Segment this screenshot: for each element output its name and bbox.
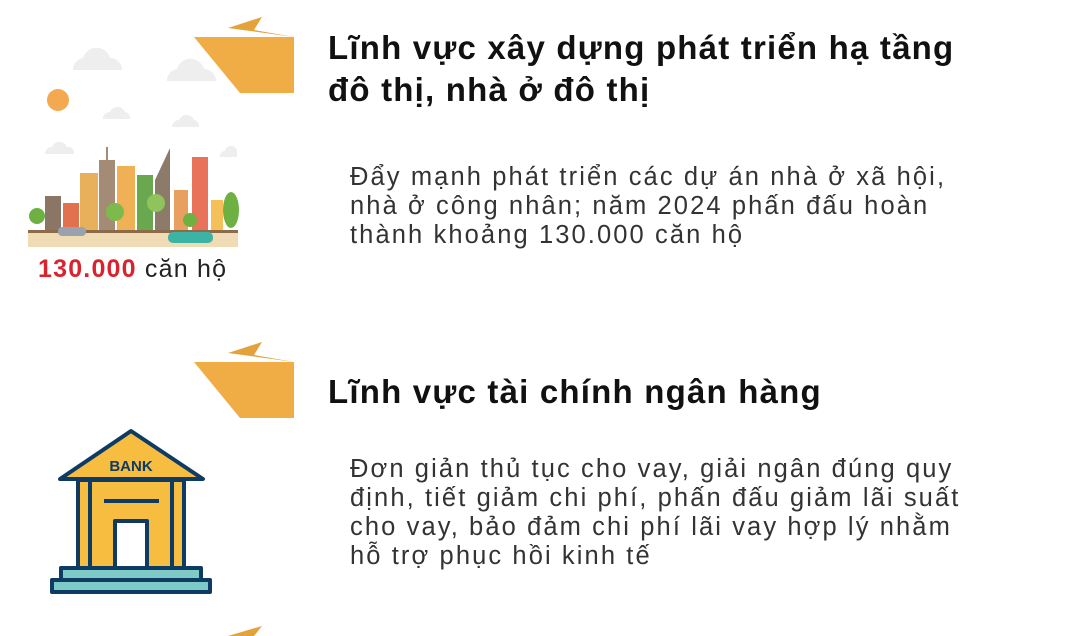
icon: bank: BANK — [109, 458, 153, 475]
text block 2: định, tiết giảm chi phí, phấn đấu giảm lãi suất — [350, 484, 960, 512]
heading 1: đô thị, nhà ở đô thị — [328, 71, 650, 108]
city illustration — [28, 48, 239, 247]
ribbon icon 2 — [194, 342, 294, 418]
text block 1: Đẩy mạnh phát triển các dự án nhà ở xã hội, — [350, 163, 946, 191]
heading 1 — [328, 29, 954, 108]
stat label: 130.000 căn hộ — [38, 255, 227, 283]
text block 2 — [350, 455, 960, 570]
ribbon icon 3 (partial) — [228, 626, 262, 636]
text block 1: nhà ở công nhân; năm 2024 phấn đấu hoàn — [350, 192, 929, 220]
ribbon icon 1 — [194, 17, 294, 93]
heading 2: Lĩnh vực tài chính ngân hàng — [328, 373, 822, 410]
text block 2: hỗ trợ phục hồi kinh tế — [350, 542, 652, 570]
heading 1: Lĩnh vực xây dựng phát triển hạ tầng — [328, 29, 954, 66]
icon: bank — [50, 429, 212, 594]
text block 2: cho vay, bảo đảm chi phí lãi vay hợp lý nhằm — [350, 513, 952, 541]
text block 1: thành khoảng 130.000 căn hộ — [350, 221, 744, 249]
text block 1 — [350, 163, 946, 249]
text block 2: Đơn giản thủ tục cho vay, giải ngân đúng quy — [350, 455, 953, 483]
